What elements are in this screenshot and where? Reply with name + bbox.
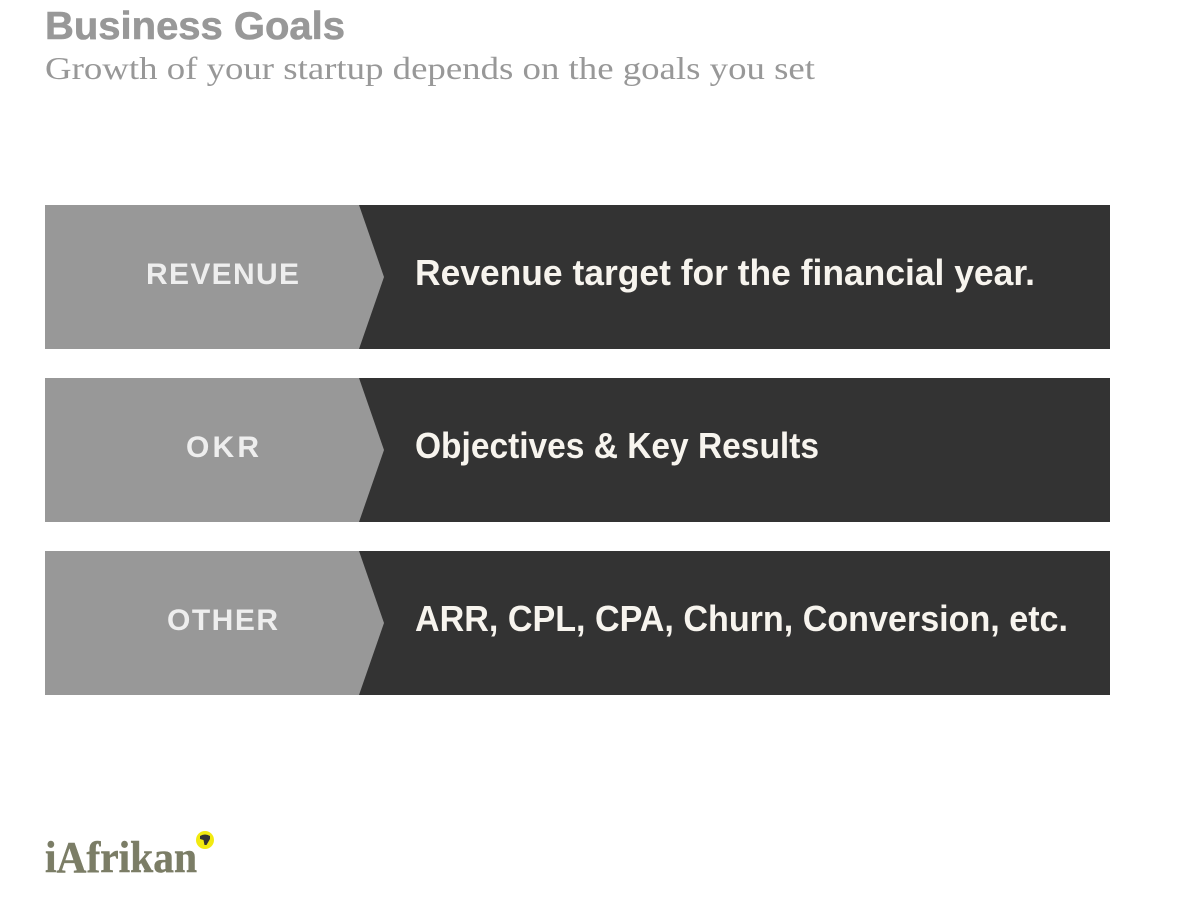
logo wordmark: iAfrikan <box>45 833 197 882</box>
panel: revenue row <box>45 205 1110 349</box>
okr description bar <box>359 378 1110 522</box>
subtitle: Growth of your startup depends on the goals you set <box>45 50 815 86</box>
panel: other row <box>45 551 1110 695</box>
okr description: Objectives & Key Results <box>415 425 819 466</box>
panel: okr row <box>45 378 1110 522</box>
icon: yellow circle with Africa <box>196 831 214 849</box>
other description bar <box>359 551 1110 695</box>
okr label: OKR <box>186 431 259 464</box>
logo: iAfrikan <box>45 831 214 882</box>
other arrow label <box>45 551 384 695</box>
revenue label: REVENUE <box>146 258 299 291</box>
other description: ARR, CPL, CPA, Churn, Conversion, etc. <box>415 598 1068 639</box>
okr arrow label <box>45 378 384 522</box>
revenue description bar <box>359 205 1110 349</box>
revenue arrow label <box>45 205 384 349</box>
title: Business Goals <box>45 5 345 48</box>
other label: OTHER <box>167 604 278 637</box>
revenue description: Revenue target for the financial year. <box>415 252 1035 293</box>
